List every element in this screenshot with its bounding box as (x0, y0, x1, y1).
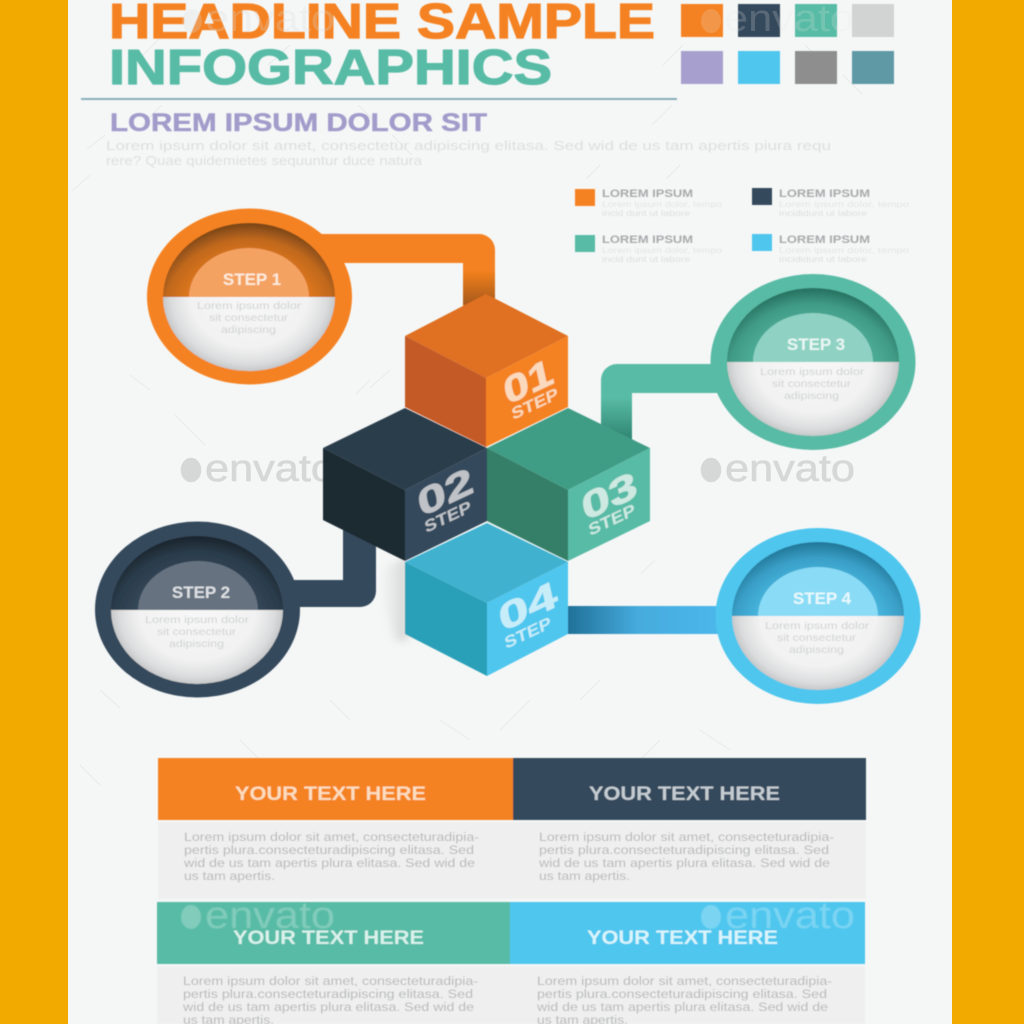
table row 1 (158, 758, 866, 899)
title: INFOGRAPHICS (109, 41, 552, 95)
cube 03: STEP (587, 500, 637, 540)
legend item: orange: incid dunt ut labore (602, 209, 691, 218)
body text: left: pertis plura.consecteturadipiscing elitasa. Sed (184, 843, 474, 857)
legend item: orange: LOREM IPSUM (602, 188, 693, 200)
header: teal (157, 902, 510, 964)
body text: left: pertis plura.consecteturadipiscing elitasa. Sed (183, 987, 473, 1001)
connector: step 2 (285, 525, 376, 607)
header: blue (510, 902, 865, 964)
step 1 circle: sit consectetur (209, 312, 289, 324)
subtitle: LOREM IPSUM DOLOR SIT (110, 109, 487, 137)
cube shadow (380, 556, 408, 642)
cube 02: 02 (414, 460, 477, 525)
body text: right: us tam apertis. (539, 869, 630, 883)
colour swatches (681, 4, 894, 84)
step 4 circle: sit consectetur (777, 632, 857, 644)
legend item: teal: incid dunt ut labore (602, 255, 691, 264)
step 3 circle: Lorem ipsum dolor (760, 366, 865, 378)
step 2 circle: Lorem ipsum dolor (145, 614, 250, 626)
body text: left: Lorem ipsum dolor sit amet, consecteturadipia- (183, 974, 478, 988)
step 2 circle: STEP 2 (172, 583, 230, 602)
step 2 circle: adipiscing (169, 638, 224, 650)
legend (575, 188, 910, 264)
step 3 circle (710, 274, 916, 450)
legend item: navy: LOREM IPSUM (779, 188, 870, 200)
legend item: blue: Lorem ipsum dolor, tempo (779, 246, 910, 255)
title (109, 0, 655, 95)
cube 02 (323, 408, 487, 561)
intro paragraph: rere? Quae quidemietes sequuntur duce natura (106, 153, 423, 168)
step 4 circle: STEP 4 (793, 589, 852, 608)
body background (158, 822, 866, 899)
body background (157, 966, 865, 1024)
body text: right: Lorem ipsum dolor sit amet, consecteturadipia- (539, 830, 834, 844)
header: teal: YOUR TEXT HERE (233, 928, 424, 949)
legend item: blue (752, 234, 910, 264)
step 3 circle: STEP 3 (787, 335, 845, 354)
step 1 circle: STEP 1 (223, 270, 281, 289)
connector: step 1 (320, 234, 495, 310)
watermark: bottom left: envato (205, 895, 335, 937)
legend item: navy: Lorem ipsum dolor, tempo (779, 200, 910, 209)
header: blue: YOUR TEXT HERE (587, 928, 778, 949)
legend item: orange: Lorem ipsum dolor, tempo (602, 200, 723, 209)
watermark: middle right: envato (725, 448, 855, 490)
legend item: navy (752, 188, 910, 218)
header: navy (513, 758, 866, 820)
legend item: blue: LOREM IPSUM (779, 234, 870, 246)
step 1 circle: Lorem ipsum dolor (197, 300, 302, 312)
connector: step 3 (601, 364, 725, 445)
cube 02: STEP (423, 497, 473, 537)
watermark: middle left: envato (205, 448, 335, 490)
legend item: teal (575, 234, 723, 264)
step 4 circle: adipiscing (789, 644, 844, 656)
legend item: teal: Lorem ipsum dolor, tempo (602, 246, 723, 255)
cube 04: 04 (495, 573, 562, 640)
body text: left: wid de us tam apertis plura elitasa. Sed wid de (183, 856, 475, 870)
body text: right (536, 974, 832, 1024)
cube 04: STEP (503, 613, 553, 653)
legend item: navy: incididunt ut labore (779, 209, 868, 218)
watermark: bottom right: envato (725, 895, 855, 937)
legend item: orange (575, 188, 723, 218)
cube 01: STEP (510, 384, 560, 424)
body text: right: Lorem ipsum dolor sit amet, consecteturadipia- (537, 974, 832, 988)
body text: left: us tam apertis. (184, 869, 275, 883)
step 4 circle (716, 528, 920, 704)
connector: step 4 (566, 606, 726, 634)
body text: right (538, 830, 834, 883)
intro paragraph (106, 138, 831, 168)
cube 03 (487, 408, 650, 561)
body text: left (182, 974, 478, 1024)
cube 01 (405, 294, 568, 447)
body text: right: pertis plura.consecteturadipiscing elitasa. Sed (537, 987, 827, 1001)
body text: right: pertis plura.consecteturadipiscing elitasa. Sed (539, 843, 829, 857)
cube 01: 01 (500, 351, 557, 413)
body text: right: wid de us tam apertis plura elitasa. Sed wid de (538, 856, 830, 870)
step 4 circle: Lorem ipsum dolor (765, 620, 870, 632)
table row 2 (157, 902, 865, 1024)
cube 03: 03 (578, 464, 641, 529)
body text: right: wid de us tam apertis plura elitasa. Sed wid de (536, 1000, 828, 1014)
legend item: teal: LOREM IPSUM (602, 234, 693, 246)
step 2 circle: sit consectetur (157, 626, 237, 638)
body text: left (183, 830, 479, 883)
header: orange: YOUR TEXT HERE (235, 784, 426, 805)
body text: left: wid de us tam apertis plura elitasa. Sed wid de (182, 1000, 474, 1014)
step 3 circle: adipiscing (784, 390, 839, 402)
body text: left: Lorem ipsum dolor sit amet, consecteturadipia- (184, 830, 479, 844)
legend item: blue: incididunt ut labore (779, 255, 868, 264)
step 2 circle (95, 522, 300, 698)
step 1 circle (147, 208, 352, 384)
header: navy: YOUR TEXT HERE (589, 784, 780, 805)
intro paragraph: Lorem ipsum dolor sit amet, consectetur adipiscing elitasa. Sed wid de us tam apertis piura requ (106, 138, 831, 153)
step 3 circle: sit consectetur (772, 378, 852, 390)
cube 04 (405, 523, 568, 676)
step 1 circle: adipiscing (221, 324, 276, 336)
header: orange (158, 758, 513, 820)
